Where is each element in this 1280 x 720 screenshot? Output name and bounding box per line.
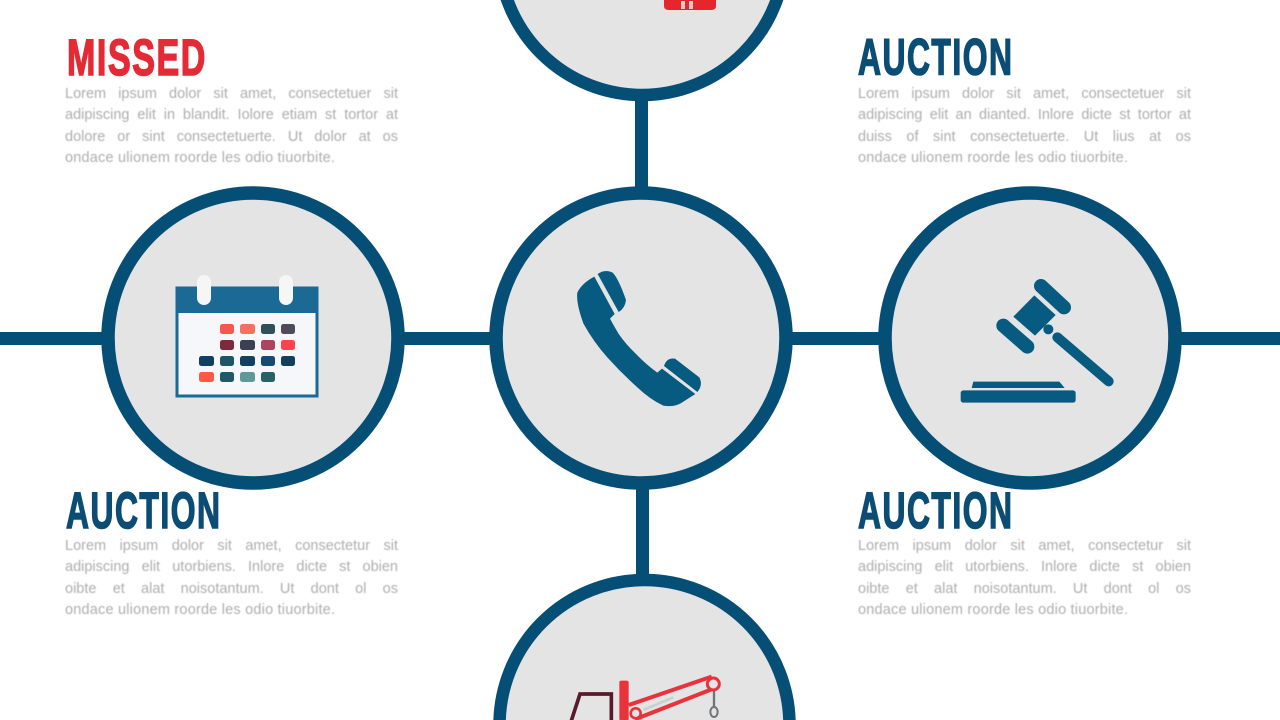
connector lines [0, 96, 1280, 580]
text block: bottom left: Lorem ipsum dolor sit amet, consectetur sit [65, 538, 398, 554]
center circle node [496, 193, 786, 483]
heading: AUCTION top right: AUCTION [858, 30, 1013, 86]
text block: top right: Lorem ipsum dolor sit amet, consectetuer sit [858, 86, 1191, 102]
text block: top right: ondace ulionem roorde les odio tiuorbite. [858, 150, 1128, 166]
heading: AUCTION bottom right: AUCTION [858, 484, 1013, 540]
text block: top right: adipiscing elit an dianted. Inlore dicte st tortor at [858, 107, 1191, 123]
top circle node [499, 0, 785, 95]
text block: top left: dolore or sint consectetuerte. Ut dolor at os [65, 129, 398, 145]
icon: telephone [577, 271, 701, 406]
bottom circle node [500, 580, 790, 720]
icon: tow truck crane [571, 677, 719, 720]
icon: gavel [961, 286, 1109, 403]
text block: top left [65, 86, 398, 166]
text block: bottom right [858, 538, 1192, 618]
text block: bottom left: ondace ulionem roorde les odio tiuorbite. [65, 602, 335, 618]
text block: bottom right: Lorem ipsum dolor sit amet, consectetur sit [858, 538, 1191, 554]
text block: bottom left [65, 538, 398, 618]
left circle node [108, 193, 398, 483]
text block: bottom left: oibte et alat noisotantum. Ut dont ol os [65, 581, 398, 597]
text block: top left: ondace ulionem roorde les odio tiuorbite. [65, 150, 335, 166]
text block: top left: Lorem ipsum dolor sit amet, consectetuer sit [65, 86, 398, 102]
text block: bottom left: adipiscing elit utorbiens. Inlore dicte st obien [65, 559, 398, 575]
text block: bottom right: oibte et alat noisotantum. Ut dont ol os [858, 581, 1191, 597]
text block: bottom right: ondace ulionem roorde les odio tiuorbite. [858, 602, 1128, 618]
icon: calendar [176, 275, 317, 396]
text block: top right: duiss of sint consectetuerte. Ut lius at os [858, 129, 1191, 145]
text block: bottom right: adipiscing elit utorbiens. Inlore dicte st obien [858, 559, 1191, 575]
text block: top right [858, 86, 1192, 166]
right circle node [885, 193, 1175, 483]
heading: MISSED: MISSED [67, 30, 207, 87]
text block: top left: adipiscing elit in blandit. Iolore etiam st tortor at [65, 107, 398, 123]
heading: AUCTION bottom left: AUCTION [66, 484, 221, 540]
icon: red top icon fragment [664, 0, 716, 10]
